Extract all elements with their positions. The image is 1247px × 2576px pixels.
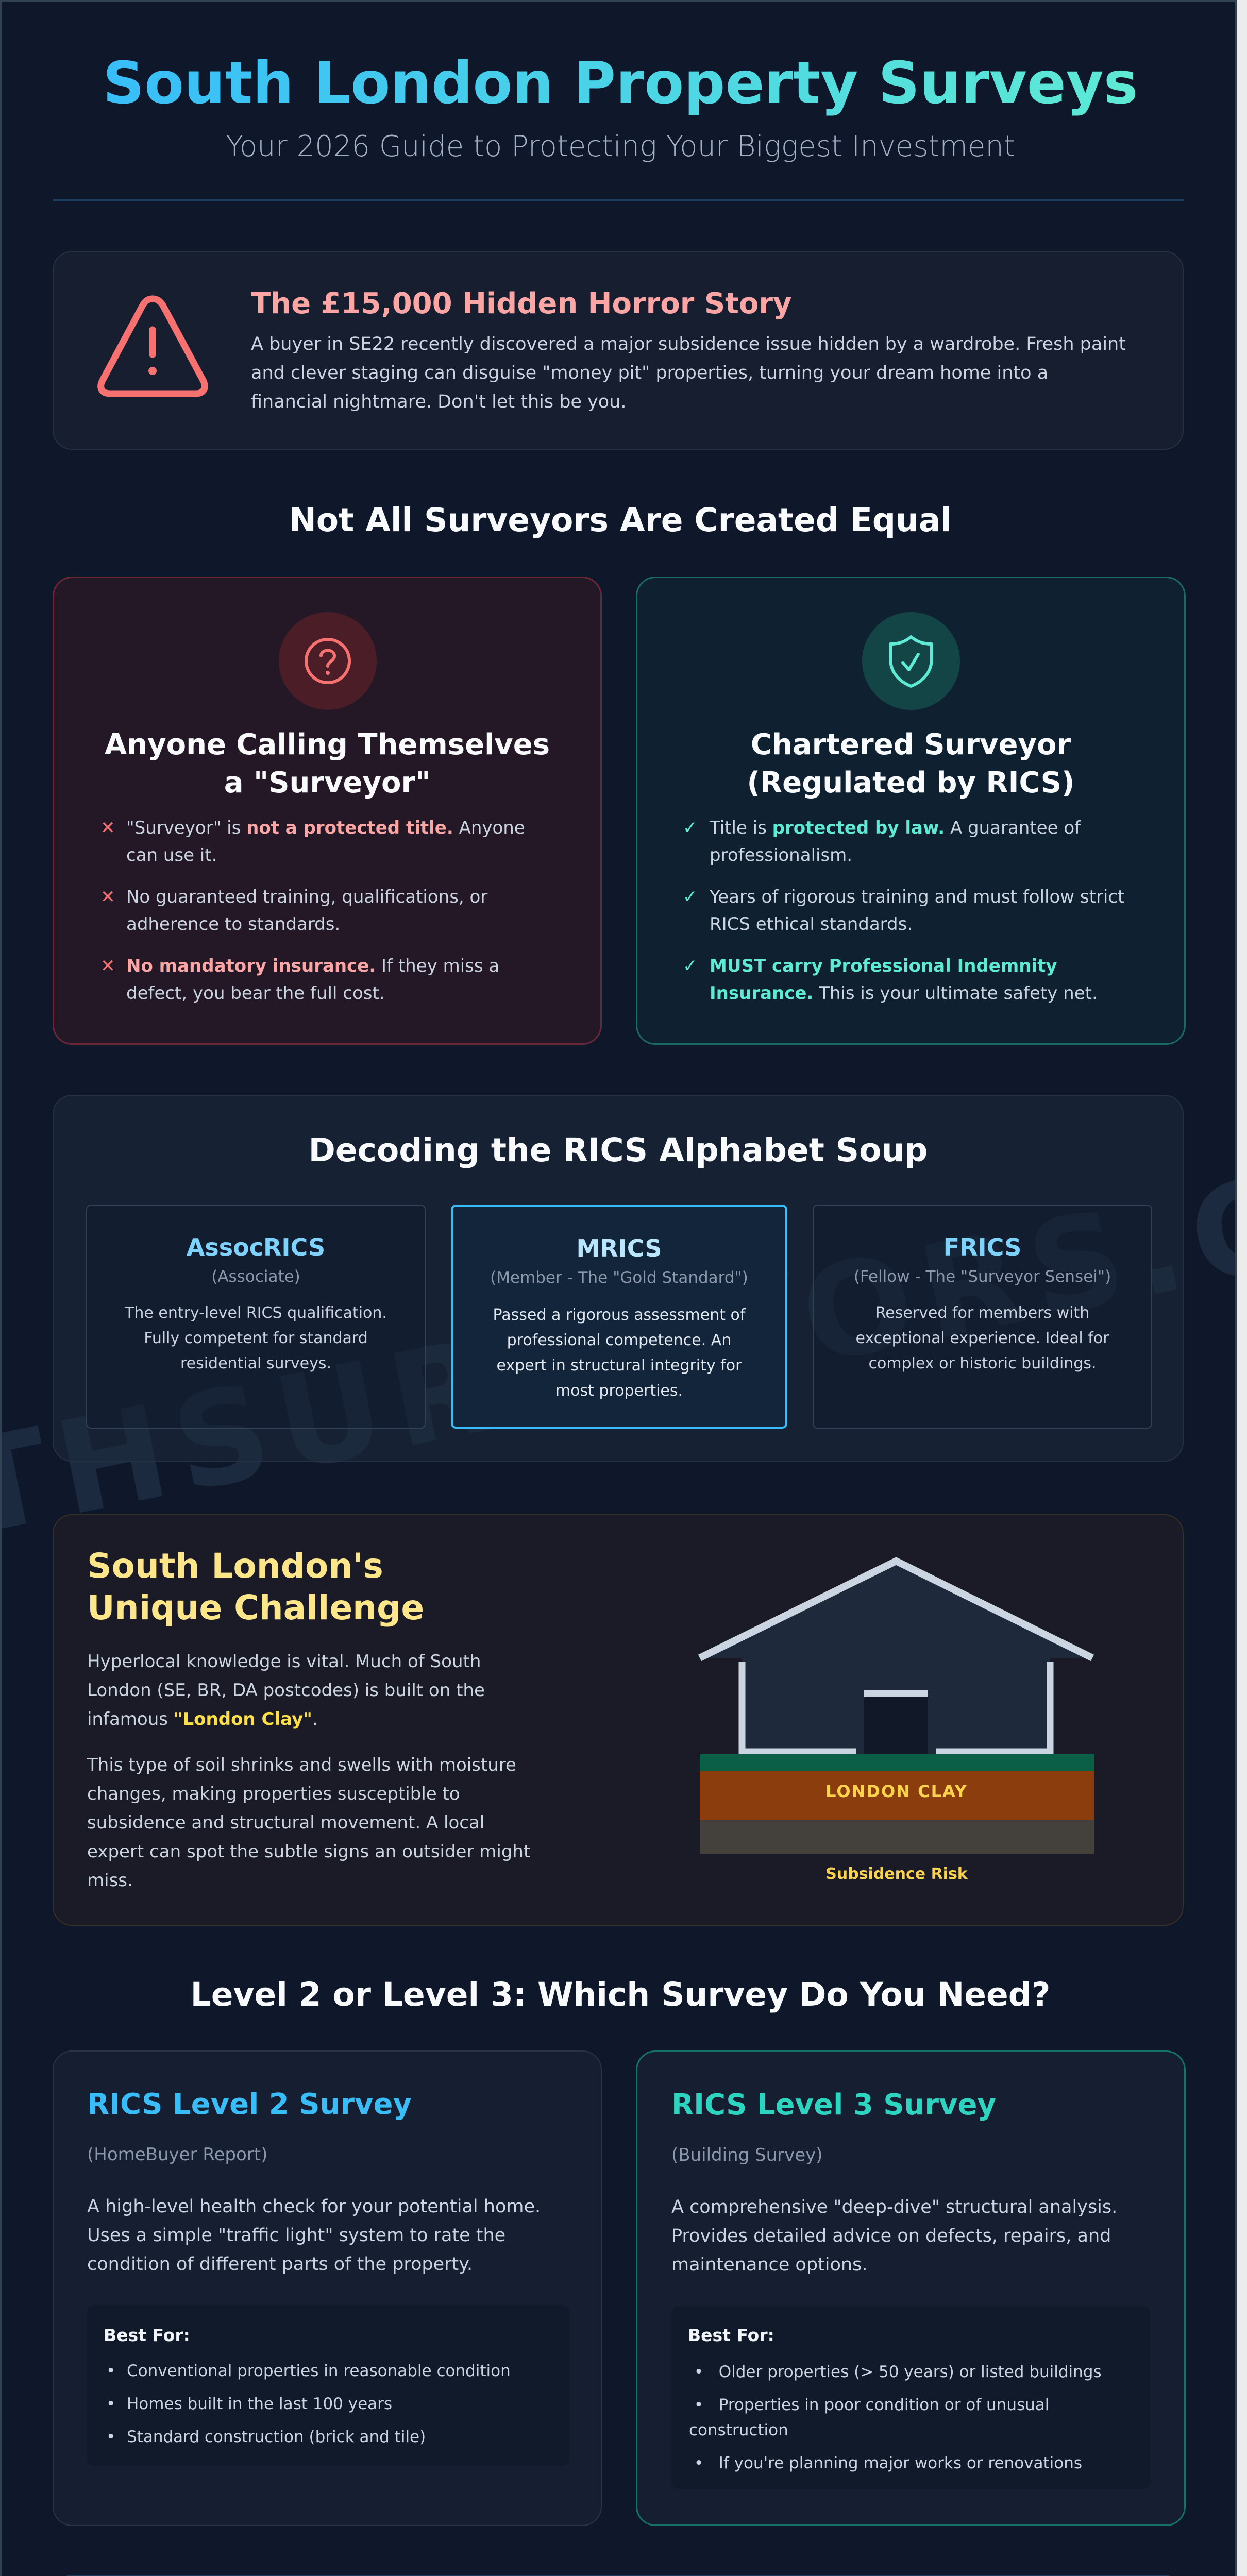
illustration: house on clay <box>698 1557 1094 1883</box>
box: AssocRICS: (Associate) <box>211 1267 300 1286</box>
panel: level 3: (Building Survey) <box>671 2145 823 2165</box>
box: AssocRICS: AssocRICS <box>187 1233 325 1261</box>
panel: level 2: A high-level health check for your potential home. <box>87 2196 541 2217</box>
alert text: A buyer in SE22 recently discovered a major subsidence issue hidden by a wardrobe. Fresh paint <box>251 334 1126 354</box>
list: negatives: No guaranteed training, qualifications, or <box>126 887 487 907</box>
best for box: • <box>106 2362 115 2380</box>
best for box: • If you're planning major works or renovations <box>694 2454 1082 2472</box>
best for box: construction <box>689 2421 788 2439</box>
list: negatives: No mandatory insurance. If they miss a <box>126 956 499 976</box>
panel: anyone surveyor: ✕ <box>100 887 115 907</box>
panel: chartered surveyor <box>636 577 1186 1045</box>
box: AssocRICS <box>86 1205 426 1429</box>
best for box: • Properties in poor condition or of unusual <box>694 2396 1049 2414</box>
alert heading: The £15,000 Hidden Horror Story <box>251 287 792 320</box>
panel: level 3: A comprehensive "deep-dive" structural analysis. <box>671 2197 1117 2217</box>
best for box: • <box>106 2395 115 2413</box>
list: positives <box>683 818 1124 1004</box>
subtitle: Your 2026 Guide to Protecting Your Biggest Investment <box>226 130 1015 163</box>
icon: shield <box>862 612 960 710</box>
box: FRICS: complex or historic buildings. <box>868 1354 1097 1372</box>
box: MRICS <box>451 1205 787 1429</box>
list: positives: MUST carry Professional Indemnity <box>710 956 1057 976</box>
heading: (Regulated by RICS) <box>747 766 1075 800</box>
list: positives: Insurance. This is your ultimate safety net. <box>710 983 1098 1004</box>
best for box: Best For: <box>688 2325 774 2345</box>
heading: South London's <box>87 1546 383 1586</box>
icon: warning triangle <box>97 296 208 397</box>
heading <box>105 728 550 800</box>
box: AssocRICS: The entry-level RICS qualification. <box>125 1304 387 1322</box>
panel: London clay challenge: This type of soil shrinks and swells with moisture <box>87 1755 516 1775</box>
icon: question <box>279 612 377 710</box>
box: FRICS: (Fellow - The "Surveyor Sensei") <box>854 1267 1111 1286</box>
panel: level 3 <box>636 2050 1186 2526</box>
heading <box>87 1546 424 1628</box>
list: positives: Title is protected by law. A guarantee of <box>710 818 1081 838</box>
panel: chartered surveyor: ✓ <box>683 818 698 838</box>
panel: anyone surveyor <box>53 577 602 1045</box>
list: positives: Years of rigorous training and must follow strict <box>710 887 1124 907</box>
panel: chartered surveyor: ✓ <box>683 956 698 976</box>
box: FRICS: Reserved for members with <box>875 1304 1089 1322</box>
panel: level 2: (HomeBuyer Report) <box>87 2144 267 2165</box>
text <box>87 1651 485 1730</box>
panel: level 3: maintenance options. <box>671 2255 867 2275</box>
heading: Chartered Surveyor <box>751 728 1071 761</box>
box: AssocRICS: residential surveys. <box>180 1354 331 1372</box>
panel: level 3: RICS Level 3 Survey <box>671 2088 996 2122</box>
panel: RICS alphabet soup <box>53 1095 1184 1462</box>
best for box: Standard construction (brick and tile) <box>127 2428 426 2446</box>
title: South London Property Surveys <box>103 50 1138 117</box>
heading: not all surveyors: Not All Surveyors Are Created Equal <box>289 501 952 539</box>
box: FRICS: FRICS <box>943 1233 1021 1261</box>
text: infamous "London Clay". <box>87 1709 318 1730</box>
panel: level 2: RICS Level 2 Survey <box>87 2088 412 2121</box>
illustration: house on clay: Subsidence Risk <box>825 1865 968 1883</box>
box: MRICS: expert in structural integrity for <box>497 1357 742 1375</box>
panel: horror story alert <box>53 251 1184 450</box>
box: MRICS: (Member - The "Gold Standard") <box>490 1268 748 1287</box>
heading: Anyone Calling Themselves <box>105 728 550 761</box>
list: positives: RICS ethical standards. <box>710 914 913 935</box>
box: MRICS: most properties. <box>555 1382 683 1400</box>
text: London (SE, BR, DA postcodes) is built on the <box>87 1680 485 1701</box>
list: negatives: defect, you bear the full cost. <box>126 983 385 1004</box>
list: negatives: "Surveyor" is not a protected title. Anyone <box>126 818 525 838</box>
panel: London clay challenge: expert can spot the subtle signs an outsider might <box>87 1841 530 1862</box>
panel: London clay challenge <box>53 1514 1184 1926</box>
list: negatives <box>100 818 525 1004</box>
panel: London clay challenge: subsidence and structural movement. A local <box>87 1812 484 1833</box>
box: MRICS: Passed a rigorous assessment of <box>493 1306 745 1324</box>
panel: level 2 <box>53 2050 602 2526</box>
illustration: house on clay: LONDON CLAY <box>825 1782 968 1801</box>
alert text: financial nightmare. Don't let this be you. <box>251 392 627 412</box>
heading <box>747 728 1075 800</box>
best for box <box>87 2305 569 2466</box>
box: FRICS <box>813 1205 1152 1429</box>
best for box: Homes built in the last 100 years <box>127 2395 392 2413</box>
text: Hyperlocal knowledge is vital. Much of South <box>87 1651 481 1672</box>
panel: London clay challenge: changes, making properties susceptible to <box>87 1784 460 1804</box>
best for box <box>671 2306 1151 2489</box>
best for box: • <box>106 2428 115 2446</box>
panel: London clay challenge: miss. <box>87 1870 133 1891</box>
best for box: Best For: <box>104 2325 190 2345</box>
box: FRICS: exceptional experience. Ideal for <box>855 1329 1109 1347</box>
box: MRICS: professional competence. An <box>507 1331 731 1349</box>
list: positives: professionalism. <box>710 845 852 866</box>
best for box: Conventional properties in reasonable condition <box>127 2362 511 2380</box>
alert text: and clever staging can disguise "money pit" properties, turning your dream home into a <box>251 363 1048 383</box>
list: negatives: can use it. <box>126 845 217 866</box>
heading: Decoding the RICS Alphabet Soup <box>309 1131 928 1169</box>
panel: phone call test <box>53 2575 1184 2576</box>
panel: level 2: condition of different parts of the property. <box>87 2254 473 2275</box>
panel: anyone surveyor: ✕ <box>100 818 115 838</box>
box: AssocRICS: Fully competent for standard <box>144 1329 368 1347</box>
alert text <box>251 334 1126 412</box>
heading: a "Surveyor" <box>224 766 430 800</box>
box: MRICS: MRICS <box>576 1234 662 1262</box>
panel: level 3: Provides detailed advice on defects, repairs, and <box>671 2226 1111 2246</box>
best for box: • Older properties (> 50 years) or listed buildings <box>694 2363 1102 2381</box>
heading: level 2 or 3: Level 2 or Level 3: Which Survey Do You Need? <box>191 1976 1050 2013</box>
panel: anyone surveyor: ✕ <box>100 956 115 976</box>
heading: Unique Challenge <box>87 1588 424 1628</box>
list: negatives: adherence to standards. <box>126 914 340 935</box>
panel: chartered surveyor: ✓ <box>683 887 698 907</box>
panel: level 2: Uses a simple "traffic light" system to rate the <box>87 2225 505 2246</box>
